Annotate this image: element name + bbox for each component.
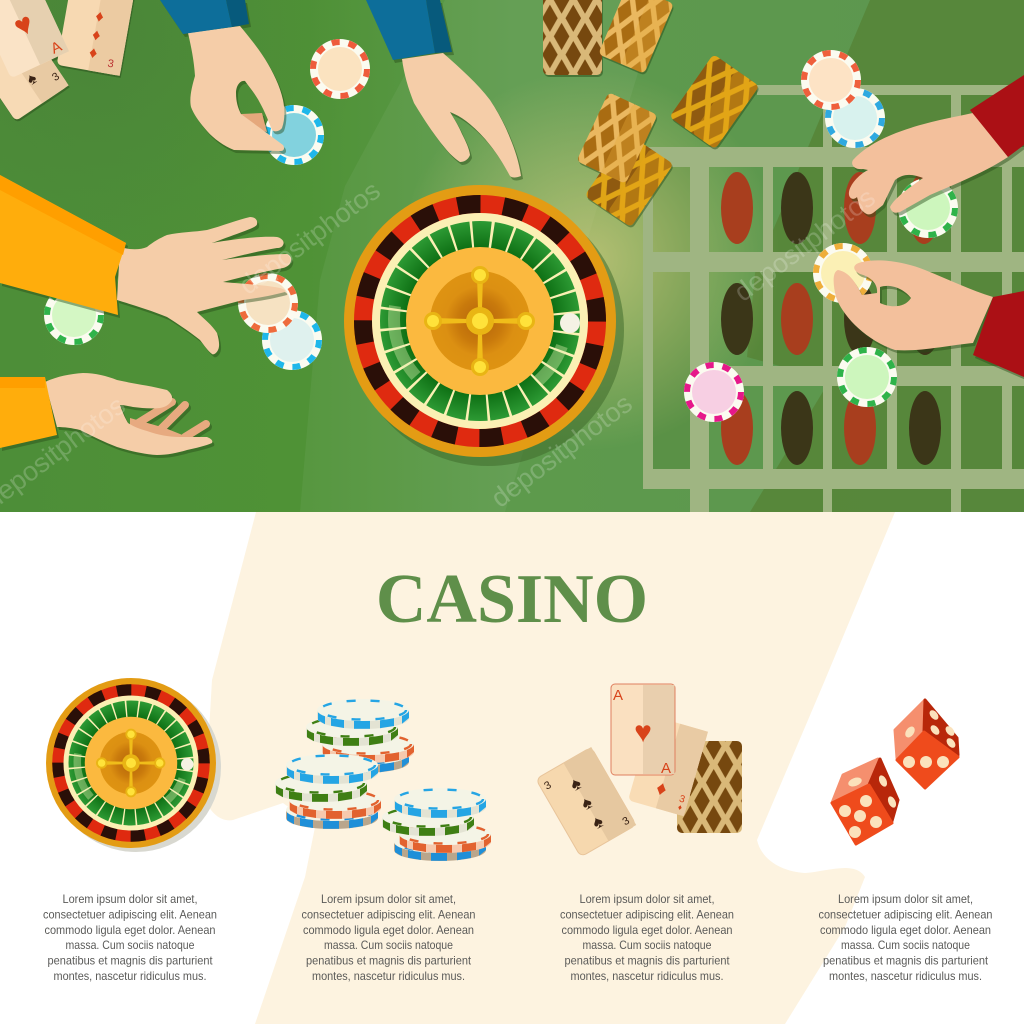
text block: chips: Lorem ipsum dolor sit amet, (321, 893, 456, 906)
card: three of diamonds (628, 716, 708, 816)
card: three of spades: 3 (542, 779, 554, 793)
text block: roulette (43, 893, 217, 983)
card: three of spades: 3 (621, 815, 632, 828)
text block: cards: commodo ligula eget dolor. Aenean (562, 924, 732, 937)
text block: chips (302, 893, 476, 983)
hand: right red sleeve, upper (849, 75, 1024, 214)
text block: dice: montes, nascetur ridiculus mus. (829, 970, 982, 983)
die: lower (832, 759, 898, 844)
stack: right (382, 788, 491, 861)
card: ace of hearts: ♥ (9, 7, 39, 44)
card: three of spades: ♠ (577, 792, 596, 814)
text block: dice: commodo ligula eget dolor. Aenean (820, 924, 991, 937)
watermark (0, 175, 881, 515)
card back (677, 741, 742, 833)
stack: back (306, 699, 414, 773)
card: three of diamonds: 3 (678, 794, 687, 806)
watermark: depositphotos (485, 388, 638, 513)
card: diamonds: ♦ (88, 44, 99, 63)
card: diamonds: 3 (107, 58, 115, 71)
text block: cards: penatibus et magnis dis parturient (564, 955, 730, 968)
stack: left (275, 754, 381, 829)
card: ace of hearts: A (661, 760, 671, 777)
card: ace of hearts: A (613, 687, 623, 704)
card: ace of hearts: A (48, 38, 65, 58)
card: spades: ♠ (24, 70, 41, 89)
hand: top blue sleeve, right (366, 0, 521, 178)
card: ace of hearts (0, 0, 69, 78)
roulette icon (45, 677, 221, 852)
text block: chips: massa. Cum sociis natoque (324, 939, 453, 952)
betting ovals (721, 172, 941, 465)
text block: roulette: montes, nascetur ridiculus mus. (54, 970, 206, 983)
text block: roulette: penatibus et magnis dis parturient (48, 955, 213, 968)
card: three of diamonds: ♦ (677, 803, 683, 812)
hand: right red sleeve, lower (834, 260, 1024, 377)
text block: chips: consectetuer adipiscing elit. Aenean (302, 908, 476, 921)
cards icon (536, 684, 742, 857)
text block: cards: Lorem ipsum dolor sit amet, (580, 893, 714, 906)
card: spades (0, 10, 69, 121)
card: ace of hearts (611, 684, 675, 777)
card: three of diamonds: ♦ (653, 777, 669, 801)
text block: roulette: consectetuer adipiscing elit. Aenean (43, 908, 217, 921)
watermark: depositphotos (728, 182, 881, 307)
title: CASINO (376, 561, 648, 638)
playing cards, top left (0, 0, 136, 121)
dice icon (832, 700, 958, 844)
card: three of spades: ♠ (566, 773, 585, 795)
text block: cards: montes, nascetur ridiculus mus. (570, 970, 724, 983)
text block: cards: consectetuer adipiscing elit. Aenean (560, 908, 734, 921)
cream background shape (205, 512, 895, 1024)
card: three of spades: ♠ (588, 811, 607, 833)
card: diamonds (57, 0, 136, 76)
card backs (543, 0, 759, 227)
text block: cards (560, 893, 734, 983)
die: upper (895, 700, 958, 788)
text block: cards: massa. Cum sociis natoque (582, 939, 712, 952)
panel: casino table top (0, 0, 1024, 515)
watermark: depositphotos (233, 175, 386, 300)
text block: roulette: Lorem ipsum dolor sit amet, (62, 893, 198, 906)
text block: chips: commodo ligula eget dolor. Aenean (303, 924, 474, 937)
text block: dice: Lorem ipsum dolor sit amet, (838, 893, 973, 906)
chips on table (44, 39, 958, 422)
roulette wheel (343, 184, 624, 466)
text block: chips: montes, nascetur ridiculus mus. (312, 970, 465, 983)
text block: dice: penatibus et magnis dis parturient (823, 955, 989, 968)
hand: left orange sleeve, lower (0, 373, 212, 455)
text block: dice: consectetuer adipiscing elit. Aenean (818, 908, 992, 921)
text block: dice: massa. Cum sociis natoque (841, 939, 970, 952)
card: spades: 3 (50, 70, 62, 84)
text block: roulette: massa. Cum sociis natoque (66, 939, 194, 952)
card: diamonds: ♦ (94, 8, 105, 26)
hand: left orange sleeve, upper (0, 175, 291, 354)
betting grid (643, 85, 1024, 512)
card: ace of hearts: ♥ (634, 716, 652, 749)
chip stacks icon (275, 699, 491, 861)
card: three of spades (536, 747, 636, 857)
text block: chips: penatibus et magnis dis parturient (306, 955, 472, 968)
card: diamonds: ♦ (91, 27, 102, 45)
hand: top blue sleeve, left (160, 0, 284, 151)
green felt (0, 0, 1024, 512)
text block: roulette: commodo ligula eget dolor. Aenean (44, 924, 216, 937)
text block: dice (818, 893, 992, 983)
